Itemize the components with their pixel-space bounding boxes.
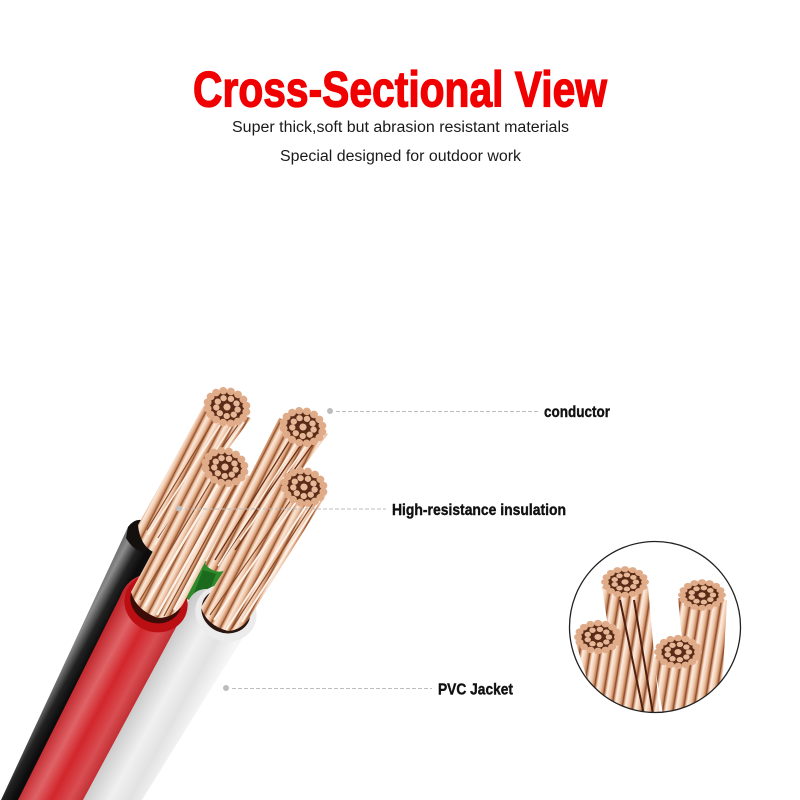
conductor strands: back left (138, 382, 255, 552)
cable illustration (1, 382, 332, 800)
subtitle line 2: Special designed for outdoor work (280, 148, 521, 165)
red wire (18, 442, 253, 800)
callout: conductor: conductor (544, 404, 610, 421)
green wire (184, 402, 331, 610)
conductor strands: front right (201, 462, 332, 631)
callout: insulation: High-resistance insulation (392, 502, 566, 519)
conductor strands: back right (205, 402, 331, 572)
subtitle line 1: Super thick,soft but abrasion resistant materials (232, 119, 569, 136)
black wire (1, 382, 255, 800)
inset: conductor close-up (570, 542, 740, 720)
inset strands: bottom (654, 634, 702, 712)
callout: conductor (327, 404, 610, 421)
inset strands: tall (601, 566, 660, 720)
title: Cross-Sectional View (193, 62, 607, 118)
callout: PVC jacket: PVC Jacket (438, 682, 514, 698)
inset strands: left (574, 620, 622, 704)
white wire (82, 462, 332, 800)
callout: insulation (176, 502, 566, 519)
inset strands: right (678, 579, 727, 693)
callout: PVC jacket (223, 682, 514, 698)
conductor strands: front middle (131, 442, 253, 618)
